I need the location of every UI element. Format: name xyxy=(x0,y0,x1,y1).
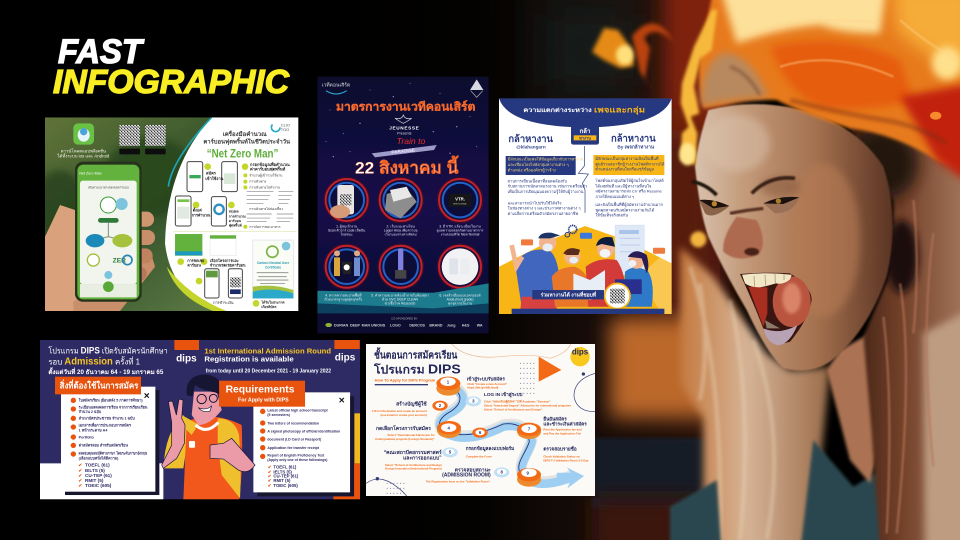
panel: job seeking comparison xyxy=(499,98,672,314)
numbered step labels: ตั้งแต่ xyxy=(193,207,202,213)
panel: Net Zero Man xyxy=(33,117,298,311)
person 4 xyxy=(623,268,653,307)
checklist card right: Application fee transfer receipt xyxy=(267,446,320,450)
phone: เส้นทางแนวทางชดเชยคาร์บอน xyxy=(88,186,129,190)
phone xyxy=(75,162,142,302)
checklist card left: ✔ xyxy=(78,463,82,468)
checklist card right: ✔ xyxy=(268,469,271,474)
checklist card left: เอกสารเพื่อการประกอบการสมัคร xyxy=(79,421,131,427)
requirements heading: Requirements xyxy=(226,385,295,396)
numbered step labels: กรอกข้อมูลเพื่อคำนวณ xyxy=(250,161,290,168)
english header: from today until 20 December 2021 - 19 January 2022 xyxy=(206,369,331,375)
Jeunesse presents: PARADISE xyxy=(391,148,415,155)
measure captions row 1: Scan คิวอาร์ code เช็คอิน xyxy=(328,226,366,232)
logo: CLIO xyxy=(281,123,290,128)
compensation cards: การชดเชย xyxy=(187,258,204,263)
route numbers: 8 xyxy=(500,470,503,475)
certificate: Certificate xyxy=(265,266,281,270)
bottom band captions: 5. ทำความสะอาดห้องน้ำภายในห้องสุขา xyxy=(371,293,429,299)
checklist card left xyxy=(61,387,159,495)
checklist card right: Two letters of recommendation xyxy=(267,421,319,425)
right column: มีลักษณะเป็นกลุ่มหางานเปิดเป็นพื้นที่ xyxy=(595,154,659,162)
route numbers: 2 xyxy=(439,403,442,408)
right column: ศูนย์รวมสมาชิกผู้ว่างงานโพสต์หางานได้ xyxy=(595,161,665,167)
checklist card left: TOEFL (61) xyxy=(85,463,110,468)
measure icons row 1 xyxy=(323,177,483,223)
app icon xyxy=(56,123,110,158)
checklist card right: Report of English Proficiency Test xyxy=(267,454,325,458)
sponsors: CO-SPONSORED BY xyxy=(391,316,418,320)
route numbers: 3 xyxy=(472,399,475,404)
left column: ค่าเฉลี่ยการเตรียมตัวสมัครงานสายอาชีพ xyxy=(508,211,578,216)
measure captions row 1: ดูแลความปลอดภัยตามมาตรการ xyxy=(437,228,484,232)
checklist heading left: สิ่งที่ต้องใช้ในการสมัคร xyxy=(60,378,139,390)
step labels right: Click "ลงทะเบียนผู้สมัคร" ไปที่ Academic "Seminar" xyxy=(484,399,551,405)
right column: กล้าหางาน xyxy=(611,132,656,144)
panel: DIPS admission requirements xyxy=(40,339,360,499)
right column: ภายใต้คอมเมนต์ต่าง ๆ xyxy=(595,194,634,199)
sponsors: LOGO xyxy=(390,324,401,328)
numbered step labels: การเดินทางไปทำงาน xyxy=(249,186,281,190)
measure captions row 1 xyxy=(328,224,484,236)
certificate: เกียรติบัตร xyxy=(261,304,277,309)
phone: ZER xyxy=(113,258,126,265)
compensation cards: เลือกโครงการและ xyxy=(210,258,239,263)
left column: มีลักษณะเป็นเพจให้ข้อมูลเกี่ยวกับการหางาน xyxy=(507,156,584,163)
right column: พูดคุยหาคนรับสมัครงานร่วมกันได้ xyxy=(595,207,655,213)
checklist card left: ✔ xyxy=(78,468,82,473)
face xyxy=(692,104,893,371)
measure icons row 2 xyxy=(323,243,483,290)
step labels right: ยืนยันสมัคร xyxy=(543,415,567,421)
compensation cards: จำนวนชดเชยคาร์บอน xyxy=(210,263,246,268)
sponsors: MAN UNIONS xyxy=(362,324,386,328)
compensation cards: การชำระเงิน xyxy=(213,300,234,305)
step labels left: ตรวจสอบสถานะ xyxy=(455,467,491,473)
requirements heading: For Apply with DIPS xyxy=(238,398,289,404)
step labels right: https://bit.ly/vhfbJeau8 xyxy=(467,386,499,390)
measure captions row 1: 2. เว้นระยะห่างโซน xyxy=(387,223,416,228)
measure icons row 1: NEW NORMAL xyxy=(453,202,468,205)
info heading xyxy=(203,130,290,160)
numbered step labels: สมัคร xyxy=(206,171,217,176)
left column: @klahangarn xyxy=(516,145,546,150)
numbered step labels: ฟุตพริ้นท์ xyxy=(229,222,242,229)
QR codes xyxy=(119,125,166,154)
checklist card right: TOEIC (605) xyxy=(273,483,298,488)
checklist card left: CU-TEP (61) xyxy=(85,473,112,478)
numbered step labels: การจัดการขยะอาหาร xyxy=(249,225,281,229)
right column: ให้ข้อเท็จจริงต่อกัน xyxy=(595,212,628,218)
top arc header xyxy=(499,98,672,127)
step labels left xyxy=(372,400,491,484)
checklist card right: ✔ xyxy=(268,474,271,479)
checklist heading left xyxy=(55,377,141,394)
step labels right xyxy=(466,376,589,462)
thai header xyxy=(48,340,199,376)
logos: เวทีคอนเสิร์ต xyxy=(322,82,350,89)
bottom band captions: 4. ตรวจความสะอาดพื้นที่ xyxy=(325,293,361,298)
bottom band captions: ทุกจุดภายในงาน xyxy=(448,302,473,307)
steps heading: How To Apply for DIPS Program xyxy=(375,378,436,383)
numbered step labels: การคำนวณ xyxy=(192,213,211,218)
checklist card left: ค่าสมัครสอบ สำหรับสมัครเรียน xyxy=(79,443,128,448)
checklist card left: ✔ xyxy=(78,478,82,483)
logo: TOO xyxy=(281,127,289,132)
numbered step labels: การเดินทางไปท่องเที่ยว xyxy=(249,206,283,211)
measure captions row 1: Lagun Area เพิ่มความจุ xyxy=(384,227,418,233)
route numbers: 7 xyxy=(528,426,531,431)
decorations: dips xyxy=(572,348,589,357)
right column: ตำแหน่งงานที่สนใจหรือแชร์ข้อมูล xyxy=(595,167,655,173)
checklist card left: TOEIC (605) xyxy=(85,483,112,488)
numbered step labels xyxy=(177,161,293,307)
briefcase logo: กล้า xyxy=(580,127,590,135)
left column xyxy=(506,133,587,216)
measure captions row 1: 1. ผู้ชมเข้างาน xyxy=(336,224,358,228)
measure captions row 1: เว้นระยะห่างทางสังคม xyxy=(385,232,417,236)
checklist card right: IELTS (5) xyxy=(273,469,292,474)
eyes and brows xyxy=(692,182,717,195)
certificate xyxy=(253,240,293,309)
steps heading: โปรแกรม DIPS xyxy=(373,363,461,377)
thai header: โปรแกรม DIPS เปิดรับสมัครนักศึกษา xyxy=(48,346,168,356)
student character xyxy=(162,374,255,499)
teeth xyxy=(742,273,792,287)
step labels right: Complete the Form xyxy=(466,455,492,459)
right column xyxy=(593,132,665,218)
numbered step labels: การเดินทาง xyxy=(249,180,267,184)
sponsors: DERCOS xyxy=(409,324,426,328)
certificate: ได้รับใบประกาศ xyxy=(260,299,285,304)
illustration: people xyxy=(499,225,672,314)
checklist card right xyxy=(253,392,354,496)
briefcase logo: หางาน xyxy=(579,135,591,140)
sponsors: H&S xyxy=(462,324,470,328)
step labels left: Select "School of Architecture and Design xyxy=(385,463,442,467)
checklist card left: จำนวน 2 ฉบับ xyxy=(79,409,102,414)
step labels right: and Pay the Application Fee xyxy=(543,431,581,435)
english header: Registration is available xyxy=(204,357,294,364)
call to action bar: ร่วมหางานได้ งานที่ชอบที่ xyxy=(541,290,597,298)
sponsors: BRAND xyxy=(429,324,443,328)
panel: DIPS application steps xyxy=(366,344,595,496)
checklist card left: ระเบียนแสดงผลการเรียน จากการเรียนเรียน xyxy=(79,404,148,409)
checklist card right: Latest official high school transcript xyxy=(267,409,329,413)
bottom band captions: ฆ่าเชื้อโรค Research xyxy=(385,301,416,306)
top arc header: ความแตกต่างระหว่าง xyxy=(523,107,592,114)
numbered step labels: ค่าคาร์บอนฟุตพริ้นท์ xyxy=(250,165,286,173)
measure icons row 1: VTR. xyxy=(455,197,465,202)
right column: By เพจกล้าหางาน xyxy=(617,144,655,150)
Jeunesse presents: Train to xyxy=(397,136,426,146)
right column: ได้เลยทันที และมีผู้หางานที่สนใจ xyxy=(594,183,651,189)
thai header: รอบ Admission ครั้งที่ 1 xyxy=(48,355,141,367)
title: FAST xyxy=(58,33,145,71)
sponsors: Jung xyxy=(447,324,455,328)
checklist card left: ✔ xyxy=(78,483,82,488)
thai header: ตั้งแต่วันที่ 20 ธันวาคม 64 - 19 มกราคม 65 xyxy=(48,366,164,376)
step labels right: DIPS-TU Validation Room 3-5 Day xyxy=(543,458,589,462)
logos xyxy=(322,79,483,97)
logo xyxy=(271,123,290,132)
mouth xyxy=(740,273,812,343)
checklist card right: ✔ xyxy=(268,465,271,470)
background flames xyxy=(592,23,674,92)
checklist card right: A signed photocopy of official identification xyxy=(267,429,340,433)
step labels left: (use Email to create your account) xyxy=(380,413,427,417)
bottom band captions xyxy=(317,283,489,313)
english header xyxy=(204,339,360,375)
sponsors: DURIAN xyxy=(334,324,349,328)
sponsors: WA xyxy=(477,324,483,328)
step labels left: Design Innovation (International Program) xyxy=(385,466,442,470)
top arc header: เพจและกลุ่ม xyxy=(594,106,645,116)
numbered step labels: การคำนวณ xyxy=(229,213,247,218)
numbered step labels: เข้าใช้งาน xyxy=(205,175,224,181)
person 3 xyxy=(586,259,627,307)
app icon: ได้ทั้งระบบ ios และ Android xyxy=(56,152,110,158)
briefcase logo xyxy=(571,127,600,145)
english header: dips xyxy=(335,352,356,363)
right column: และยังเป็นพื้นที่ที่ผู้สมัครงานจำนวนมาก xyxy=(595,200,663,208)
route numbers: 9 xyxy=(526,470,529,475)
route numbers xyxy=(432,377,541,487)
left column: และเชื่อมโยงไปยังกลุ่มหางานต่าง ๆ xyxy=(508,162,569,168)
step labels left: Undergraduate program (Foreign Students)" xyxy=(375,437,435,441)
checklist card right: (Apply only one of these followings) xyxy=(267,458,327,462)
route numbers: 1 xyxy=(447,379,450,384)
checklist card left: (เลือกแบบหนึ่งได้มีความ) xyxy=(79,455,119,461)
sponsors xyxy=(325,318,482,328)
step labels left: และการออกแบบ” xyxy=(403,455,442,461)
photo: screaming woman xyxy=(670,0,960,540)
checklist card right: ✕ xyxy=(338,396,345,405)
left column: ในช่องทางต่าง ๆ และประกาศหางานต่าง ๆ xyxy=(508,206,581,211)
hair right side xyxy=(847,123,960,540)
step labels right: Print the Application fee and xyxy=(543,428,582,432)
call to action bar xyxy=(512,283,664,314)
checklist card left: ✕ xyxy=(143,391,150,400)
left column: เพื่อเป็นการเปิดมุมมองความรู้ให้กับผู้ว่างงาน xyxy=(508,188,584,195)
checklist card left: ✔ xyxy=(78,473,82,478)
step labels left: Fill in information and create an account xyxy=(372,409,427,413)
clothing xyxy=(670,440,897,540)
stars xyxy=(326,83,477,157)
step labels right: กรอกข้อมูลลงแบบฟอร์ม xyxy=(466,445,514,452)
left column: ผ่านการเขียนเนื้อหาที่สอดคล้องกับ xyxy=(508,176,567,183)
bottom band captions: Anda (food grade) xyxy=(447,298,473,302)
Jeunesse presents: JEUNESSE xyxy=(389,125,419,130)
step labels left: กดเลือกโครงการรับสมัคร xyxy=(376,425,431,432)
step labels left: Select "International Admission for xyxy=(388,433,436,437)
left column: และสามารถนำไปปรับใช้ได้จริง xyxy=(508,200,562,205)
checklist card right: TOEFL (61) xyxy=(273,465,297,470)
right column: สมัครงานสามารถส่ง CV หรือ Resume xyxy=(595,189,662,194)
measure captions row 1: 3. มี VTR. แจ้งระเบียบในงาน xyxy=(439,223,482,228)
step labels right: และชำระเงินค่าสมัคร xyxy=(543,420,587,426)
split lightning divider xyxy=(578,146,588,213)
step labels right: Select "Interested Degree" Admission for international programs xyxy=(484,404,571,408)
step labels right: LOG IN เข้าสู่ระบบ xyxy=(484,391,523,398)
checklist card right: ✔ xyxy=(268,478,271,483)
checklist card left: ใบสมัครเรียน (ย้อนหลัง 5 ภาคการศึกษา) xyxy=(79,398,143,403)
hair top flame xyxy=(679,0,960,247)
bottom band captions: ด้วยมาตรฐานสูงสุดทุกครั้ง xyxy=(325,297,363,303)
measure captions row 1: ไทยชนะ xyxy=(340,232,353,236)
white info side xyxy=(165,117,298,311)
thai header: dips xyxy=(176,354,197,365)
checklist card left: สำเนาบัตรประชาชน จำนวน 1 ฉบับ xyxy=(79,415,135,421)
step labels right: Check Validation Status on xyxy=(543,454,580,458)
info heading: คาร์บอนฟุตพริ้นท์ในชีวิตประจำวัน xyxy=(203,136,290,145)
numbered step labels: จำนวนผู้เข้าร่วมใช้งาน xyxy=(249,174,283,178)
concert heading: มาตรการงานเวทีคอนเสิร์ต xyxy=(336,99,475,113)
numbered step labels: สรุปผล xyxy=(229,209,239,215)
measure captions row 1: งานคอนเสิร์ต New Normal xyxy=(441,232,480,236)
checklist card left: 1 หน้ากระดาษ A4 xyxy=(79,428,108,433)
checklist card right: ✔ xyxy=(268,483,271,488)
checklist card right: document (I.D Card or Passport) xyxy=(267,437,321,441)
phone: Net Zero Man xyxy=(79,172,102,176)
date heading: 22 สิงหาคม นี้ xyxy=(355,156,459,178)
Jeunesse presents xyxy=(372,115,437,157)
checklist card right: (5 semesters) xyxy=(267,413,290,417)
steps heading: ชั้นตอนการสมัครเรียน xyxy=(374,347,458,362)
left column: กับสถานการณ์ตลาดแรงงาน เช่นการเตรียมตัว xyxy=(508,184,587,189)
left column: ตำแหน่ง หรือองค์กรผู้ว่าจ้าง xyxy=(508,167,556,173)
compensation cards xyxy=(173,232,297,305)
sponsors: DEEP xyxy=(350,324,361,328)
bottom band captions: ด้วย UVC DEEP CLEAN xyxy=(382,298,419,302)
checklist card left: IELTS (5) xyxy=(85,468,105,473)
step labels left: The Registration form on the "Validation Room" xyxy=(426,480,491,484)
checklist card right: CU-TEP (61) xyxy=(273,474,299,479)
decorations xyxy=(366,344,595,496)
requirements heading xyxy=(219,381,305,407)
app icon: ดาวน์โหลดแอปพลิเคชัน xyxy=(61,148,106,154)
neck xyxy=(827,333,887,483)
lower left blond hair xyxy=(680,247,830,540)
step labels left: (ADMISSION ROOM) xyxy=(442,473,491,479)
person 1 xyxy=(515,249,560,307)
person 2 xyxy=(552,267,592,307)
steps heading xyxy=(373,347,461,385)
numbered step labels: คาร์บอน xyxy=(229,219,242,223)
bottom band captions: 6. เจลล้างมือแบบแอลกอฮอล์ xyxy=(439,293,481,298)
small phone steps xyxy=(175,162,242,298)
step labels right: Select "School of Architecture and Design" xyxy=(484,408,543,412)
step labels right: ตรวจสอบรายชื่อ xyxy=(543,445,577,451)
checklist card left: Portfolio xyxy=(79,435,94,439)
head edge flames xyxy=(681,9,717,165)
info heading: “Net Zero Man” xyxy=(207,146,278,160)
step labels right: Click "Create a new Account" xyxy=(467,382,508,386)
checklist card left: RMIT (5) xyxy=(85,478,104,483)
step labels left: สร้างบัญชีผู้ใช้ xyxy=(396,400,427,408)
Jeunesse presents: Presents xyxy=(397,132,412,136)
nose xyxy=(723,217,763,259)
route ribbon xyxy=(440,385,584,488)
right column: โพสต์ของกลุ่มเปิดให้ผู้สนใจเข้ามาโพสต์ xyxy=(595,178,664,184)
title xyxy=(53,33,290,100)
left column: กล้าหางาน xyxy=(508,133,553,145)
english header: 1st International Admission Round xyxy=(204,349,331,356)
panel: concert measures xyxy=(317,77,489,333)
step labels left: “คณะสถาปัตยกรรมศาสตร์ xyxy=(384,449,442,456)
info heading: เครื่องมือคำนวณ xyxy=(223,130,268,138)
checklist card left: ผลสอบคุณสมบัติทางภาษา โดยระดับภาษาอังกฤษ xyxy=(79,450,148,456)
step labels right: เข้าสู่ระบบรับสมัคร xyxy=(467,376,505,383)
certificate: Carbon Neutral User xyxy=(257,261,290,265)
route numbers: 6 xyxy=(479,430,482,435)
route numbers: 5 xyxy=(449,450,452,455)
route numbers: 4 xyxy=(447,425,450,430)
compensation cards: คาร์บอน xyxy=(187,263,201,268)
hand holding phone xyxy=(45,205,155,311)
title: INFOGRAPHIC xyxy=(53,63,290,100)
checklist card right: RMIT (5) xyxy=(273,478,291,483)
